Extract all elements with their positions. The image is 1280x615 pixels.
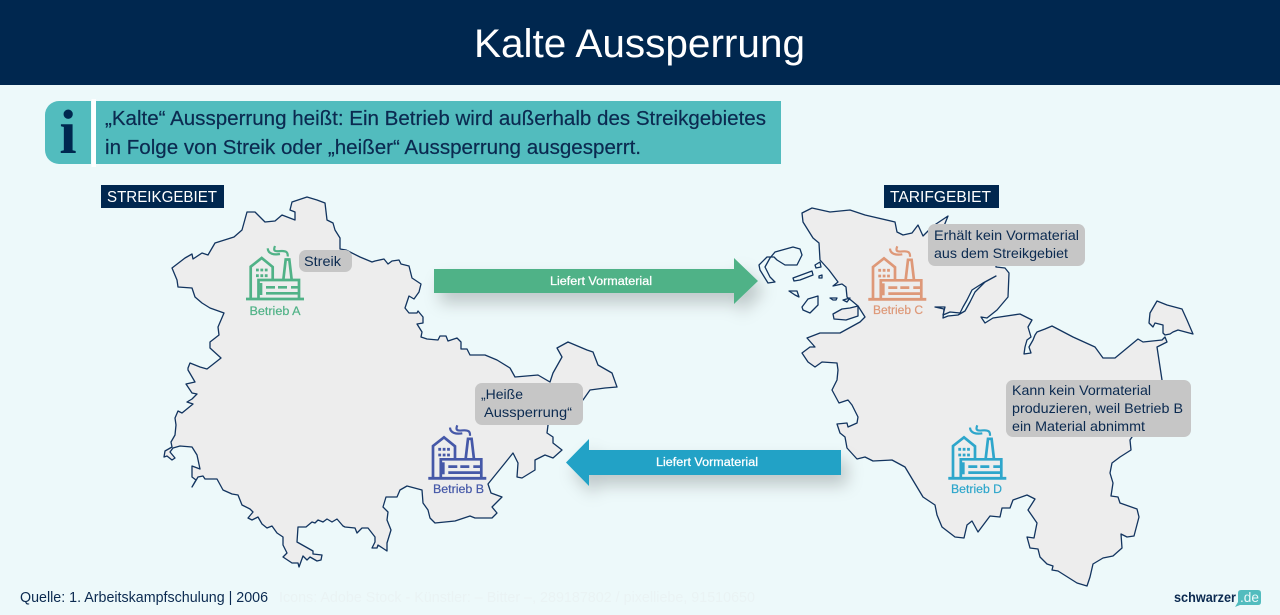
- icon: Betrieb D: [948, 425, 1006, 496]
- label: Streikgebiet: [101, 185, 224, 208]
- callout: Streik: Streik: [304, 253, 342, 269]
- info text: in Folge von Streik oder „heißer“ Aussperrung ausgesperrt.: [105, 137, 641, 159]
- arrow: blue, Tarifgebiet to Streikgebiet: [566, 439, 841, 486]
- label: Streikgebiet: STREIKGEBIET: [107, 189, 217, 206]
- arrow: green, Streikgebiet to Tarifgebiet: Liefert Vormaterial: [550, 276, 652, 288]
- info text: „Kalte“ Aussperrung heißt: Ein Betrieb wird außerhalb des Streikgebietes: [105, 108, 766, 130]
- callout: Streik: [299, 250, 352, 272]
- callout: Kann kein Vormaterial: Kann kein Vormaterial: [1012, 382, 1151, 398]
- logo: schwarzer.de: schwarzer: [1174, 590, 1237, 605]
- callout: Heiße Aussperrung: Aussperrung“: [484, 404, 572, 420]
- icon: Betrieb A: [246, 246, 304, 318]
- icon: Betrieb B: Betrieb B: [433, 484, 484, 496]
- icon: info: i: [59, 99, 77, 167]
- label: Tarifgebiet: [884, 185, 999, 208]
- arrow: blue, Tarifgebiet to Streikgebiet: Liefert Vormaterial: [656, 457, 758, 469]
- icon credits: Icons: Adobe Stock - Künstler: – Bitter –, 289187802 / pixelliebe, 91510650: [279, 590, 755, 606]
- callout: Erhält kein Vormaterial: Erhält kein Vormaterial: [934, 227, 1079, 243]
- callout: Heiße Aussperrung: „Heiße: [481, 386, 523, 402]
- callout: Heiße Aussperrung: [475, 383, 583, 425]
- icon: Betrieb C: [868, 246, 926, 317]
- callout: Kann kein Vormaterial: [1006, 380, 1191, 437]
- icon: Betrieb C: Betrieb C: [873, 305, 923, 317]
- callout: Kann kein Vormaterial: ein Material abnimmt: [1012, 418, 1145, 434]
- callout: Erhält kein Vormaterial: aus dem Streikgebiet: [934, 245, 1068, 261]
- icon: info: [45, 99, 91, 167]
- icon: Betrieb D: Betrieb D: [951, 484, 1002, 496]
- icon: Betrieb A: Betrieb A: [250, 306, 301, 318]
- callout: Kann kein Vormaterial: produzieren, weil Betrieb B: [1012, 400, 1183, 416]
- info text: [96, 101, 781, 164]
- callout: Erhält kein Vormaterial: [928, 224, 1085, 266]
- label: Tarifgebiet: TARIFGEBIET: [890, 189, 991, 206]
- icon: Betrieb B: [428, 425, 486, 496]
- title: Kalte Aussperrung: [474, 22, 805, 66]
- header bar: [0, 0, 1280, 85]
- logo: schwarzer.de: [1174, 590, 1261, 607]
- info panel: [45, 99, 781, 167]
- map: Streikgebiet: [164, 197, 617, 567]
- logo: schwarzer.de: .de: [1240, 590, 1259, 605]
- arrow: green, Streikgebiet to Tarifgebiet: [434, 258, 758, 304]
- source line: Quelle: 1. Arbeitskampfschulung | 2006: [20, 590, 268, 606]
- map: Tarifgebiet: [759, 208, 1193, 586]
